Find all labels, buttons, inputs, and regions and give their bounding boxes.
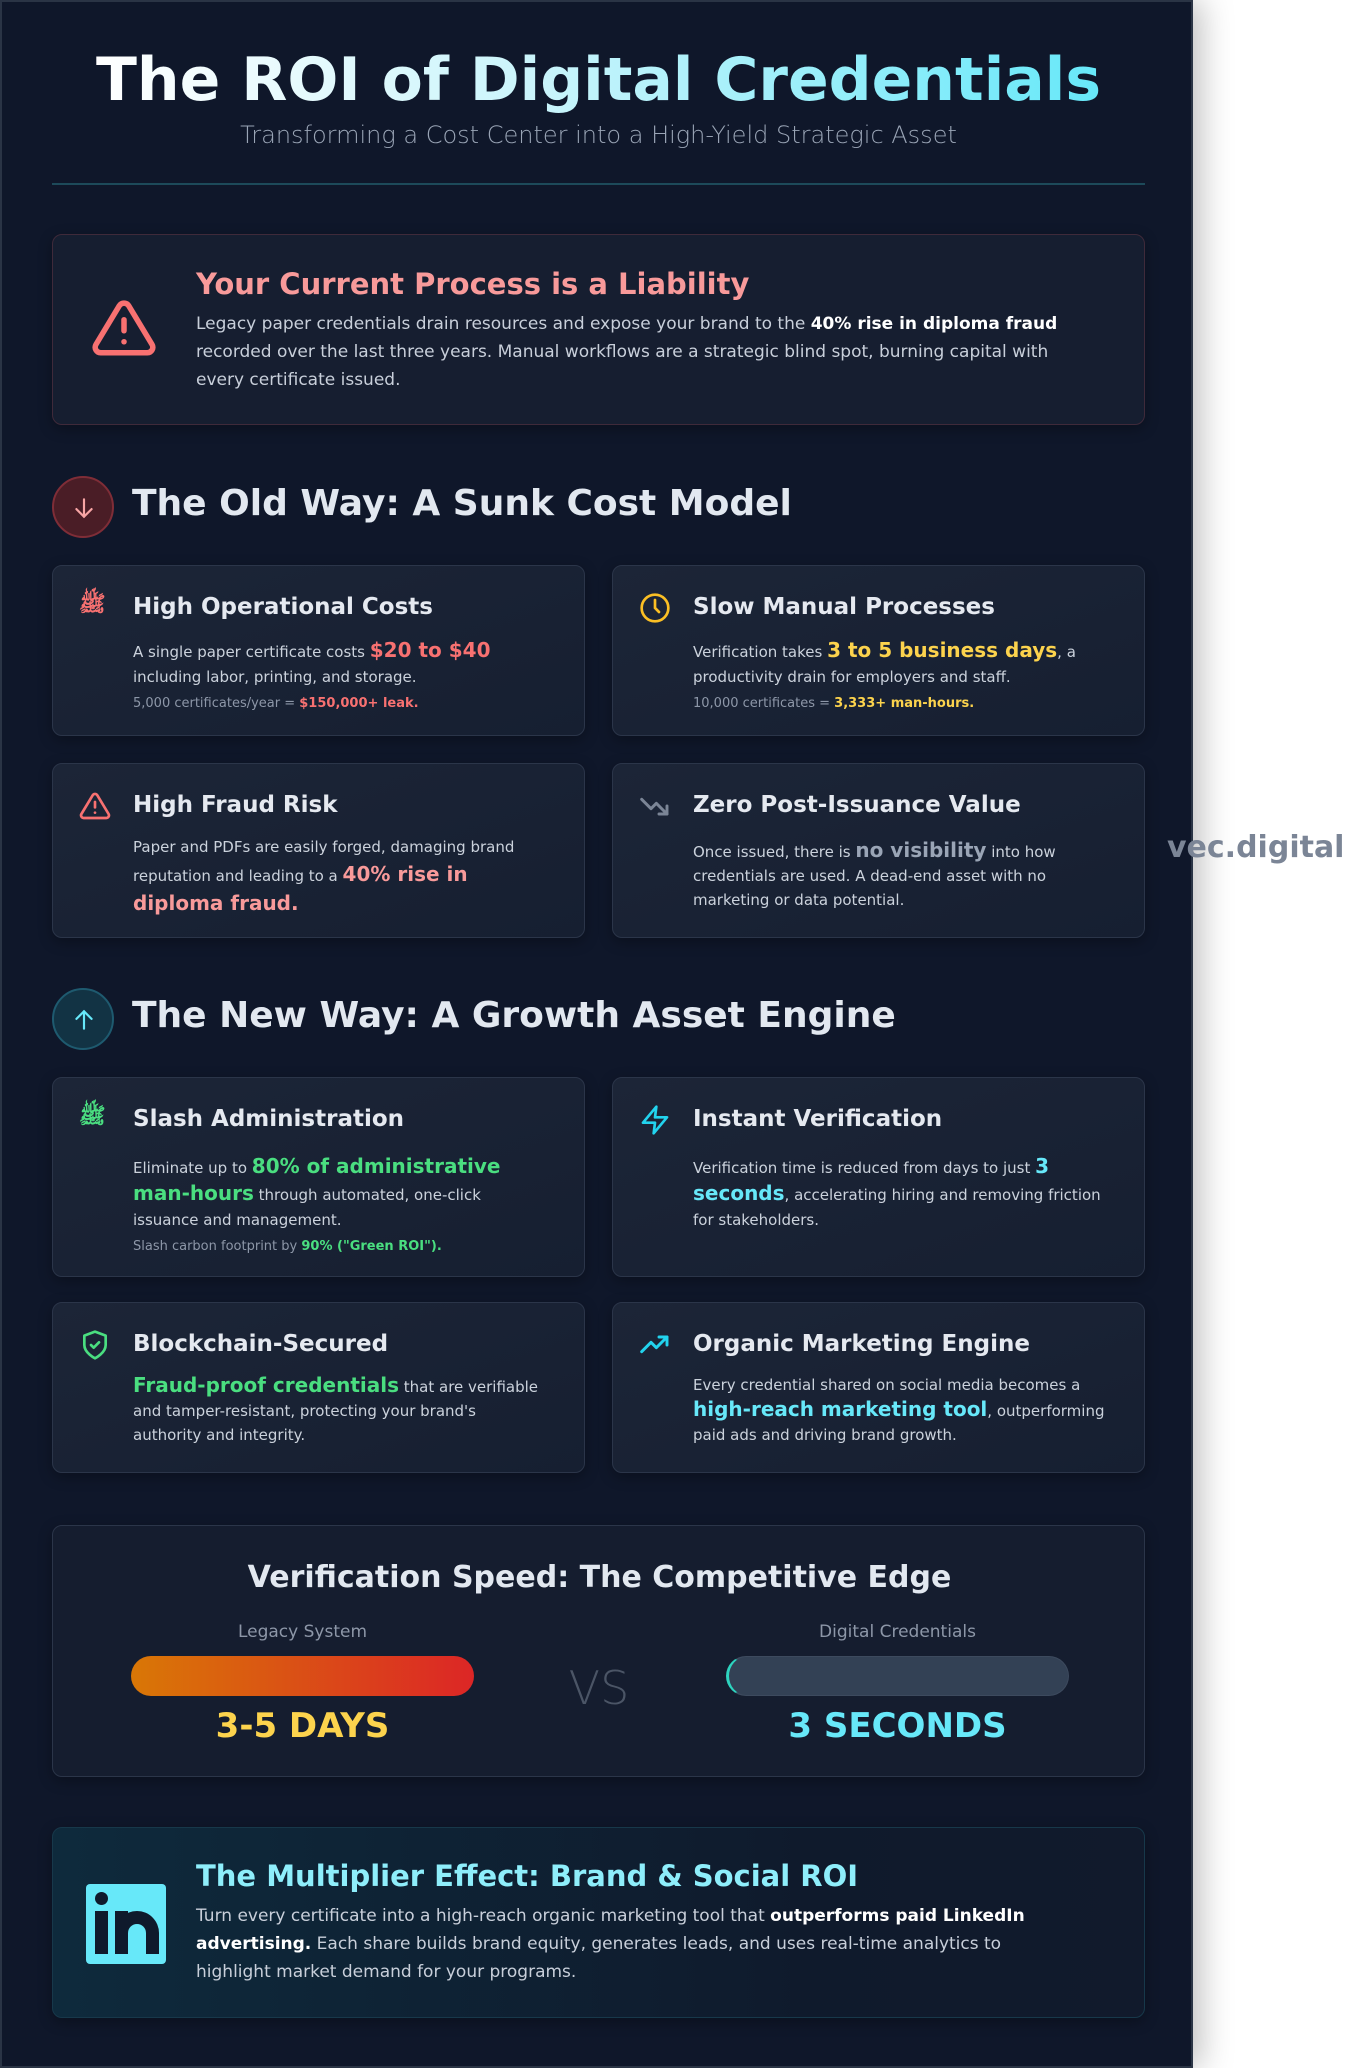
icon: warning <box>92 300 156 356</box>
card: instant verification: Instant Verification <box>693 1106 942 1132</box>
heading: Verification Speed: The Competitive Edge <box>248 1560 951 1595</box>
card: blockchain-secured <box>52 1302 585 1473</box>
panel: multiplier effect <box>52 1827 1145 2018</box>
icon: linkedin <box>86 1884 166 1964</box>
card: slash administration: Slash carbon footprint by 90% ("Green ROI"). <box>133 1239 442 1254</box>
icon: down arrow <box>52 476 114 538</box>
card: slash administration: Slash Administration <box>133 1106 404 1132</box>
card: instant verification <box>612 1077 1145 1277</box>
card: slow manual processes: Verification takes 3 to 5 business days, a productivity drain for employers and staff. <box>693 638 1076 686</box>
card: slash administration <box>52 1077 585 1277</box>
card: high fraud risk: High Fraud Risk <box>133 792 338 818</box>
chart: legacy: 3-5 DAYS <box>216 1706 389 1746</box>
icon: money: ﷺ <box>79 1104 106 1129</box>
card: slash administration: Eliminate up to 80% of administrative man-hours through automated, one-click issuance and management. <box>133 1154 500 1229</box>
icon: clock <box>640 593 670 623</box>
watermark: vec.digital <box>1167 830 1344 865</box>
chart: legacy <box>131 1622 474 1746</box>
text: Legacy paper credentials drain resources and expose your brand to the 40% rise in diploma fraud recorded over the last three years. Manual workflows are a strategic blind spot, burning capital with every certificate issued. <box>196 314 1057 390</box>
card: slow manual processes <box>612 565 1145 736</box>
icon: up arrow <box>52 988 114 1050</box>
card: high operational costs <box>52 565 585 736</box>
card: slow manual processes: Slow Manual Processes <box>693 594 995 620</box>
title: The ROI of Digital Credentials <box>96 45 1101 115</box>
card: zero post-issuance value: Once issued, there is no visibility into how credentials are used. A dead-end asset with no marketing or data potential. <box>693 838 1056 909</box>
card: blockchain-secured: Fraud-proof credentials that are verifiable and tamper-resistant, protecting your brand's authority and integrity. <box>133 1373 538 1444</box>
card: high fraud risk: Paper and PDFs are easily forged, damaging brand reputation and leading to a 40% rise in diploma fraud. <box>133 838 514 915</box>
panel: verification speed <box>52 1525 1145 1777</box>
icon: trend down <box>640 798 668 816</box>
card: organic marketing engine: Every credential shared on social media becomes a high-reach marketing tool, outperforming paid ads and driving brand growth. <box>693 1376 1104 1444</box>
icon: money: ﷺ <box>79 592 106 617</box>
icon: warning <box>80 792 110 820</box>
section heading: old way: The Old Way: A Sunk Cost Model <box>132 483 792 524</box>
card: blockchain-secured: Blockchain-Secured <box>133 1331 388 1357</box>
icon: trend up <box>640 1336 668 1354</box>
chart: digital: Digital Credentials <box>819 1622 976 1642</box>
chart: legacy: Legacy System <box>238 1622 367 1642</box>
text: Turn every certificate into a high-reach organic marketing tool that outperforms paid LinkedIn advertising. Each share builds brand equity, generates leads, and uses real-time analytics to highlight market demand for your programs. <box>196 1906 1025 1982</box>
card: organic marketing engine: Organic Marketing Engine <box>693 1331 1030 1357</box>
card: slow manual processes: 10,000 certificates = 3,333+ man-hours. <box>693 696 974 711</box>
heading: The Multiplier Effect: Brand & Social ROI <box>196 1859 858 1893</box>
card: high operational costs: A single paper certificate costs $20 to $40 including labor, printing, and storage. <box>133 638 490 686</box>
heading: Your Current Process is a Liability <box>196 267 749 301</box>
chart: digital <box>726 1622 1069 1746</box>
section heading: new way <box>52 988 896 1050</box>
chart: digital: 3 SECONDS <box>788 1706 1007 1746</box>
section heading: old way <box>52 476 792 538</box>
card: zero post-issuance value <box>612 763 1145 938</box>
card: high fraud risk <box>52 763 585 938</box>
card: high operational costs: 5,000 certificates/year = $150,000+ leak. <box>133 696 419 711</box>
panel: liability <box>52 234 1145 425</box>
card: zero post-issuance value: Zero Post-Issuance Value <box>693 792 1021 818</box>
card: instant verification: Verification time is reduced from days to just 3 seconds, accelerating hiring and removing friction for stakeholders. <box>693 1154 1101 1229</box>
subtitle: Transforming a Cost Center into a High-Yield Strategic Asset <box>240 121 957 149</box>
icon: shield <box>83 1330 107 1360</box>
icon: bolt <box>642 1105 668 1135</box>
section heading: new way: The New Way: A Growth Asset Engine <box>132 995 896 1036</box>
card: organic marketing engine <box>612 1302 1145 1473</box>
label: VS: VS <box>569 1661 629 1715</box>
card: high operational costs: High Operational Costs <box>133 594 433 620</box>
